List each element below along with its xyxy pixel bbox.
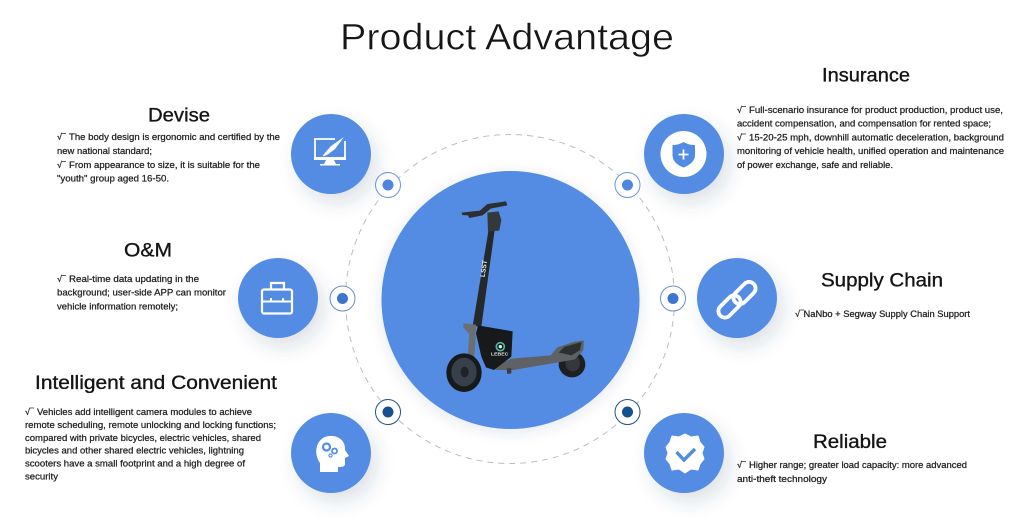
connector node: top left bbox=[376, 172, 400, 198]
panel: Reliable bbox=[737, 431, 967, 484]
kickstand bbox=[507, 368, 511, 374]
stem lettering: LSST bbox=[480, 260, 489, 278]
text block: Devise details bbox=[57, 132, 280, 184]
panel: O&M bbox=[57, 240, 226, 312]
scooter illustration bbox=[446, 201, 585, 392]
text block: Supply Chain details: NaNbo + Segway Supply Chain Support bbox=[804, 309, 971, 319]
text block: Intelligent details: Vehicles add intelligent camera modules to achieve bbox=[37, 407, 252, 417]
text block: Intelligent details: scooters have a small footprint and a high degree of bbox=[25, 458, 246, 468]
text block: O&M details: background; user-side APP can monitor bbox=[57, 288, 226, 298]
panel: Supply Chain bbox=[795, 270, 971, 319]
text block: Intelligent details: √ bbox=[25, 407, 30, 417]
connector node: top right bbox=[615, 172, 640, 198]
handlebar bbox=[462, 201, 507, 218]
connector node: bottom right bbox=[615, 400, 640, 424]
front basket bbox=[476, 325, 513, 370]
panel: Intelligent and Convenient bbox=[25, 372, 278, 482]
text block: O&M details: vehicle information remotely; bbox=[57, 302, 178, 312]
text block: Intelligent details bbox=[25, 407, 276, 482]
text block: Insurance details: of power exchange, safe and reliable. bbox=[737, 160, 893, 170]
text block: Intelligent details: remote scheduling, remote unlocking and locking functions; bbox=[25, 420, 276, 430]
panel: Insurance bbox=[737, 64, 1004, 170]
heading: O&M: O&M bbox=[124, 240, 172, 262]
text block: Reliable details: √ bbox=[737, 460, 742, 470]
text block: Intelligent details: compared with private bicycles, electric vehicles, shared bbox=[25, 433, 261, 443]
front fork bbox=[463, 323, 476, 360]
text block: Devise details: From appearance to size, it is suitable for the bbox=[69, 160, 260, 170]
heading: Intelligent and Convenient: Intelligent and Convenient bbox=[35, 372, 278, 394]
connector node: middle left bbox=[330, 286, 355, 311]
text block: Insurance details: monitoring of vehicle health, unified operation and maintenance bbox=[737, 146, 1004, 156]
text block: Intelligent details: bicycles and other shared electric vehicles, lightning bbox=[25, 446, 244, 456]
rear wheel bbox=[559, 351, 585, 377]
icon: chain link bbox=[697, 258, 777, 338]
central blue circle bbox=[382, 171, 640, 429]
icon: design monitor bbox=[291, 114, 371, 194]
panel: Devise bbox=[57, 104, 280, 184]
text block: Devise details: new national standard; bbox=[57, 146, 152, 156]
text block: Devise details: √ bbox=[57, 132, 62, 142]
deck and rear fender bbox=[493, 340, 584, 370]
text block: Insurance details: accident compensation, and compensation for rented space; bbox=[737, 118, 991, 128]
title: Product Advantage bbox=[340, 16, 674, 58]
text block: Supply Chain details: √ bbox=[795, 309, 800, 319]
text block: O&M details: Real-time data updating in the bbox=[69, 274, 199, 284]
icon: head with gears bbox=[291, 413, 371, 493]
basket logo: LEBEC bbox=[491, 351, 508, 356]
basket logo bbox=[491, 343, 508, 356]
icon: shield bbox=[644, 114, 724, 194]
text block: Devise details: "youth" group aged 16-50. bbox=[57, 174, 169, 184]
text block: Insurance details: √ bbox=[737, 105, 742, 115]
text block: O&M details bbox=[57, 274, 226, 312]
steering stem bbox=[473, 229, 495, 327]
connector node: bottom left bbox=[376, 400, 400, 424]
icon: toolbox bbox=[238, 258, 318, 338]
text block: Insurance details: Full-scenario insurance for product production, product use, bbox=[749, 105, 1003, 115]
heading: Insurance: Insurance bbox=[822, 64, 910, 86]
heading: Supply Chain: Supply Chain bbox=[821, 270, 943, 292]
text block: Reliable details: anti-theft technology bbox=[737, 474, 828, 484]
text block: Devise details: The body design is ergonomic and certified by the bbox=[69, 132, 280, 142]
text block: Reliable details bbox=[737, 460, 967, 484]
text block: O&M details: √ bbox=[57, 274, 62, 284]
heading: Reliable: Reliable bbox=[813, 431, 887, 453]
text block: Intelligent details: security bbox=[25, 472, 59, 482]
text block: Insurance details bbox=[737, 105, 1004, 170]
icon: verified badge bbox=[644, 413, 724, 493]
front wheel bbox=[446, 353, 482, 392]
connector node: middle right bbox=[660, 286, 686, 311]
dashed orbit ring bbox=[346, 134, 674, 464]
text block: Insurance details: 15-20-25 mph, downhill automatic deceleration, background bbox=[749, 132, 1004, 142]
heading: Devise: Devise bbox=[148, 104, 210, 126]
text block: Devise details: √ bbox=[57, 160, 62, 170]
text block: Insurance details: √ bbox=[737, 132, 742, 142]
text block: Reliable details: Higher range; greater load capacity: more advanced bbox=[749, 460, 967, 470]
